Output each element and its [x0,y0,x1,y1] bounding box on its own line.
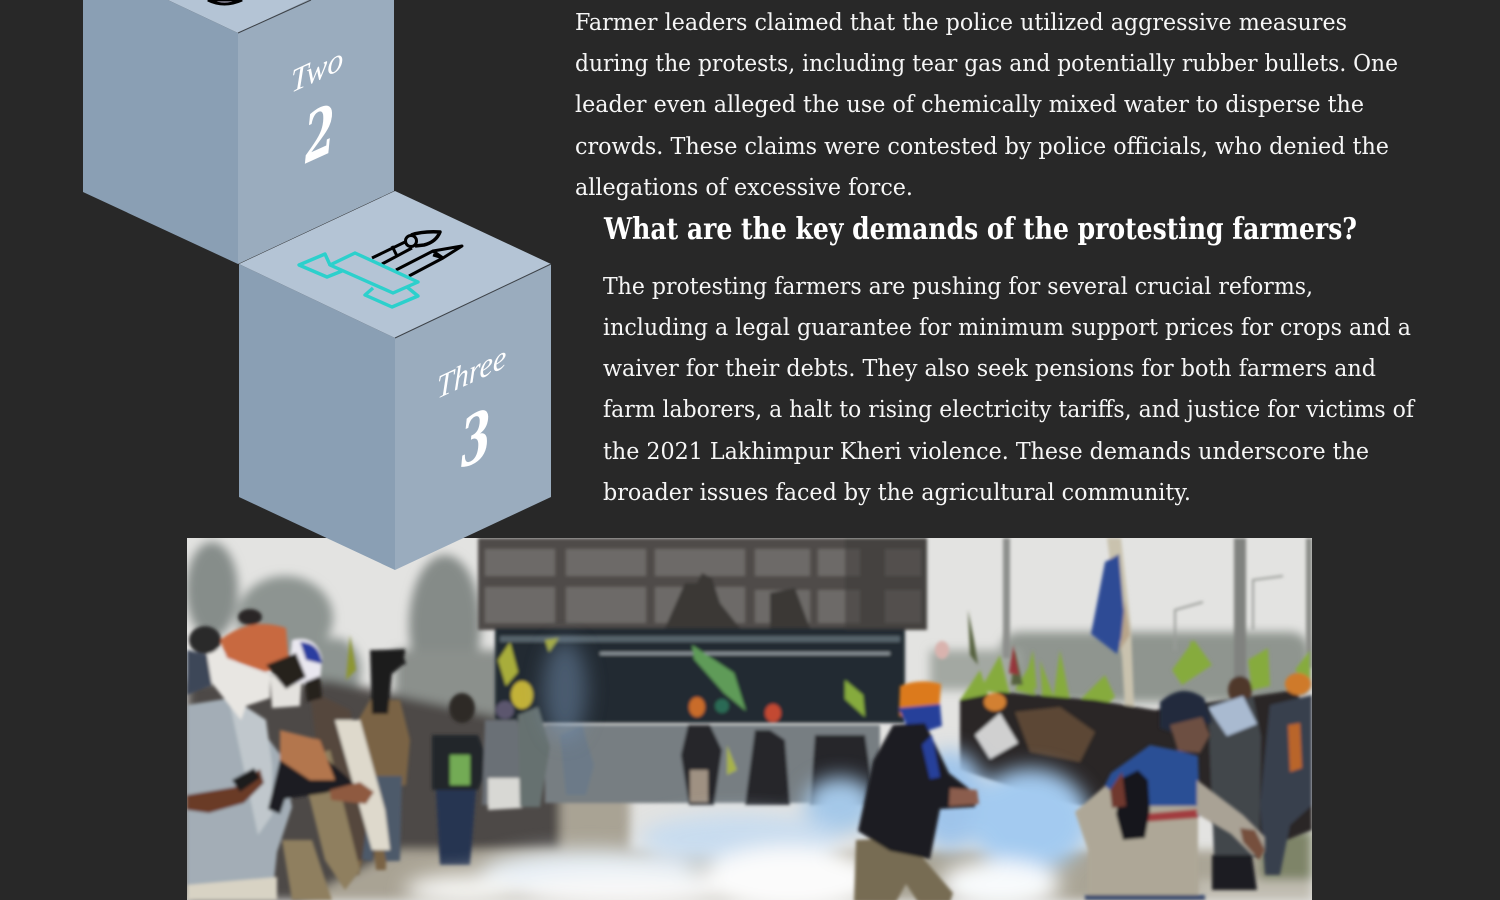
number 3: 3 [456,392,495,487]
text block: police measures [575,8,1398,201]
icon: teal outline [299,253,418,307]
text block: key demands: broader issues faced by the agricultural community. [603,478,1191,506]
icon: circle on cube two [208,0,242,4]
photo: farmers and tear gas smoke [186,538,1312,900]
text block: key demands [603,272,1416,506]
foreground figures over smoke [854,681,1265,900]
people mass left [187,680,560,900]
label: Two: Two [291,41,343,101]
cube three top face [239,191,551,338]
text block: police measures: Farmer leaders claimed that the police utilized aggressive measures [575,8,1347,36]
cube two top face [83,0,394,33]
icon: bullets [372,232,462,276]
text block: key demands: farm laborers, a halt to rising electricity tariffs, and justice for victims of [603,395,1416,423]
cube two right face [238,0,394,264]
foreground left man [187,697,292,900]
number 2: 2 [300,87,339,182]
camera on tripod [380,646,408,666]
text block: key demands: The protesting farmers are pushing for several crucial reforms, [603,272,1313,300]
left people [356,698,412,876]
text block: key demands: including a legal guarantee for minimum support prices for crops and a [603,313,1411,341]
label: Three: Three [437,339,506,407]
cube two left face [83,0,238,264]
cube three [239,191,551,570]
tear gas smoke [405,640,1090,900]
text block: key demands: waiver for their debts. They also seek pensions for both farmers and [603,354,1376,382]
heading: key demands: What are the key demands of the protesting farmers? [603,212,1357,247]
cube two [83,0,394,264]
text block: police measures: allegations of excessive force. [575,173,913,201]
cube three left face [239,264,395,570]
text block: police measures: leader even alleged the use of chemically mixed water to disperse the [575,90,1364,118]
cube three right face [395,264,551,570]
crowd mid-right [960,690,1312,850]
text block: key demands: the 2021 Lakhimpur Kheri violence. These demands underscore the [603,437,1369,465]
text block: police measures: during the protests, including tear gas and potentially rubber bullets. One [575,49,1398,77]
text block: police measures: crowds. These claims were contested by police officials, who denied the [575,132,1389,160]
crowd behind smoke [681,725,875,805]
